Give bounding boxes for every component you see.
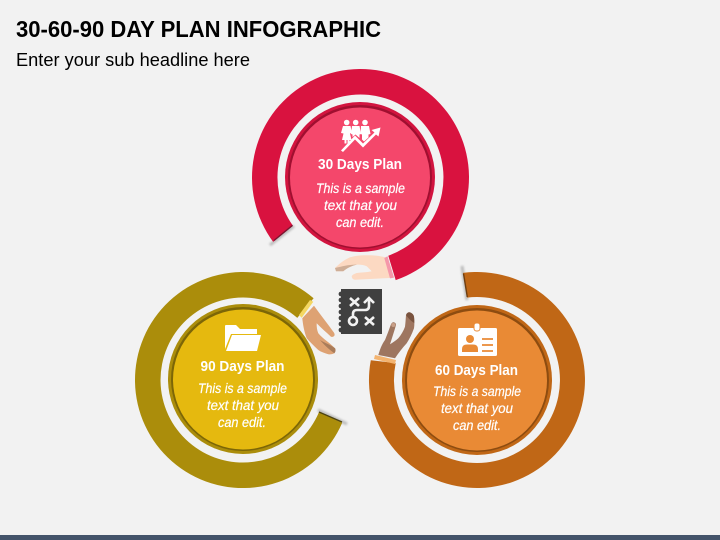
panel: 90 days plan	[135, 272, 347, 488]
panel: 30 days plan	[252, 69, 469, 280]
heading: 90 days plan: 90 Days Plan	[200, 359, 284, 375]
hand: 90 days	[299, 300, 336, 354]
text block: 90 days: text that you	[207, 398, 279, 413]
badge circle: 30 days	[285, 102, 435, 252]
icon: ID badge	[458, 323, 497, 356]
subtitle: Enter your sub headline here	[16, 50, 250, 70]
text block: 30 days: This is a sample	[316, 181, 405, 196]
text block: 60 days: text that you	[441, 401, 513, 416]
badge circle: 60 days	[402, 305, 552, 455]
title: 30-60-90 DAY PLAN INFOGRAPHIC	[16, 16, 381, 42]
ring: 90 days	[135, 272, 347, 488]
text block: 90 days	[198, 381, 287, 430]
text block: 30 days: can edit.	[336, 215, 384, 230]
footer bar	[0, 535, 720, 540]
ring: 60 days	[369, 266, 585, 488]
text block: 60 days: can edit.	[453, 418, 501, 433]
hand: 30 days	[335, 255, 394, 280]
text block: 30 days: text that you	[324, 198, 397, 213]
text block: 90 days: This is a sample	[198, 381, 287, 396]
hand: 60 days	[374, 312, 414, 364]
heading: 30 days plan: 30 Days Plan	[318, 157, 402, 173]
text block: 60 days	[433, 384, 521, 433]
ring: 30 days	[252, 69, 469, 280]
text block: 30 days	[316, 181, 405, 230]
icon: people with rising arrow	[341, 120, 380, 152]
badge circle: 90 days	[168, 304, 318, 454]
text block: 90 days: can edit.	[218, 415, 266, 430]
icon: strategy notebook	[339, 289, 382, 334]
panel: 60 days plan	[369, 266, 585, 488]
icon: folder	[225, 325, 261, 351]
text block: 60 days: This is a sample	[433, 384, 521, 399]
heading: 60 days plan: 60 Days Plan	[435, 363, 518, 379]
